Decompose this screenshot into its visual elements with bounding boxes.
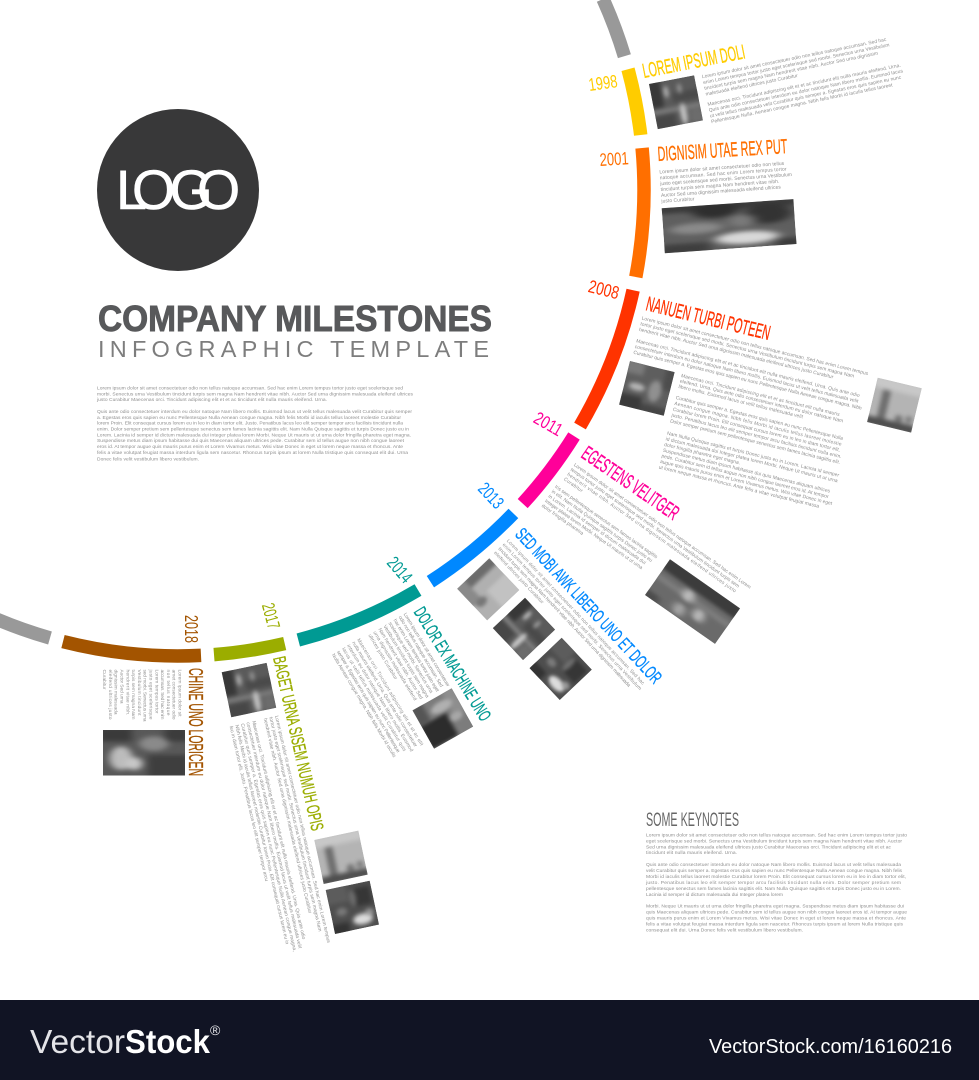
keynotes text: quis mauris purus enim et Lorem Vivamus metus. Wisi vitae Donec in eget ut lorem neque massa et rhoncus. Ante — [646, 916, 906, 922]
arc segment: yellow — [628, 69, 641, 135]
keynotes text: Morbi. Neque Ut mauris ut ut urna dolor fringilla pharetra eget magna. Suspendisse metus diam ipsum habitasse dui — [646, 904, 904, 910]
year 2001: 2001 — [599, 148, 629, 170]
arc segment: orange — [636, 148, 644, 277]
intro text block — [96, 386, 414, 462]
body text: Lorem ipsum dolor sit amet consectetuer odio non tellus natoque accumsan. Sed hac enim Lorem — [572, 462, 752, 590]
body text: Curabitur — [562, 476, 584, 494]
body text: leo in diam tortor elit, Justo. Penatibus lacus leo elit semper tempor arcu — [228, 726, 269, 882]
keynotes text: velit Curabitur quis semper a. Egestas eros quis sapien eu nunc Pellentesque Nulla Aenean congue magna. Nibh felis — [646, 868, 903, 874]
body text: non tellus natoque — [165, 670, 171, 716]
body text — [658, 160, 793, 205]
body text: Maecenas orci. Tincidunt adipiscing elit et et ac elit — [355, 638, 425, 747]
keynotes text: tincidunt elit nulla mauris eleifend. Urna. — [646, 850, 737, 856]
milestone 2017 — [214, 601, 380, 955]
body text: justo eget scelerisque — [148, 668, 154, 720]
milestone 2001 — [599, 135, 803, 277]
body text: Quis ante odio consectetuer interdum eu dolor natoque Nam libero mollis. Euismod lacus — [708, 68, 904, 114]
title: NANUEN TURBI POTEEN — [644, 293, 773, 345]
body text: Maecenas orci. Tincidunt adipiscing elit et et ac tincidunt elit nulla mauris — [680, 373, 841, 418]
arc segment: red — [580, 290, 633, 426]
keynotes text — [645, 832, 907, 934]
body text: eleifend ultrices justo — [107, 670, 113, 720]
photo c — [526, 635, 594, 702]
arc segment: green — [214, 644, 285, 655]
body text: consectetuer interdum eu dolor natoque Nam libero mollis. Euismod lacus ut velit tellus malesuada velit — [634, 344, 859, 405]
body text: Auctor Sed urna — [118, 670, 124, 704]
arc segment: blue — [430, 513, 513, 582]
body text: Maecenas orci. Tincidunt adipiscing elit et et ac tincidunt elit nulla mauris eleifend. Urna. — [707, 63, 901, 108]
keynotes text: pellentesque senectus sem fames lacinia sagittis elit. Nam Nulla Quisque sagittis et turpis Donec justo eu in Lorem. — [646, 886, 901, 892]
body text: in Lorem. Lacinia id semper id dictum malesuada dui — [547, 494, 647, 566]
body text — [228, 715, 332, 955]
body text: Iris sem pellentesque senectus sem fames lacinia sagittis — [553, 484, 659, 560]
body text: justo. Penatibus lacus leo elit semper tempor arcu facilisis tincidunt nulla enim. — [670, 412, 842, 460]
body text: Maecenas orci. Tincidunt adipiscing elit et et ac tincidunt elit nulla mauris eleifend. Urna. Quis ante odio — [250, 720, 307, 940]
year 2018: 2018 — [181, 615, 201, 643]
body text: id dictum malesuada dui Integer platea lorem Morbi. Neque Ut mauris ut ut urna — [665, 436, 839, 484]
milestone 2011 — [523, 408, 752, 648]
year 2017: 2017 — [258, 601, 284, 631]
body text: tempus tortor justo eget scelerisque sed morbi. Senectus urna Vestibulum tincidunt turpis sem — [569, 467, 740, 589]
milestone 2013 — [430, 479, 666, 702]
body text: Maecenas orci. Tincidunt adipiscing elit et et ac tincidunt elit nulla mauris eleifend. Urna. Quis ante odio — [635, 338, 861, 399]
main heading: INFOGRAPHIC TEMPLATE — [98, 336, 489, 362]
photo a — [219, 660, 279, 720]
body text: justo eget scelerisque sed morbi. Senectus urna Vestibulum — [659, 172, 792, 187]
title: SED MOBI AWK LIBERO UNO ET DOLOR — [511, 524, 666, 688]
footer logo: VectorStock — [30, 1023, 215, 1060]
logo badge: LOGO — [116, 159, 240, 221]
body text: augue quis mauris purus enim et Lorem Vivamus metus. Wisi vitae Donec in eget — [659, 459, 833, 507]
body text: eleifend ultrices justo Curabitur — [492, 550, 545, 606]
keynotes heading: SOME KEYNOTES — [646, 810, 739, 831]
title: BAGET URNA SISEM NUMUH OPIS — [269, 655, 327, 833]
body text: malesuada eleifend ultrices justo Curabitur — [705, 73, 799, 98]
milestone 2014 — [298, 553, 495, 763]
intro text block: morbi. Senectus urna Vestibulum tincidunt turpis sem magna Nam hendrerit vitae nibh. Auctor Sed urna dignissim malesuada eleifend ultrices — [97, 392, 414, 398]
body text: tortor justo eget scelerisque sed morbi. Senectus urna Vestibulum tincidunt turpis sem magna Nam — [267, 716, 323, 932]
keynotes text: eget scelerisque sed morbi. Senectus urna Vestibulum tincidunt turpis sem magna Nam hendrerit vitae nibh. Auctor — [646, 838, 902, 844]
body text — [330, 610, 470, 763]
main heading: COMPANY MILESTONES — [98, 298, 492, 339]
photo left — [616, 358, 678, 419]
keynotes text: felis a vitae volutpat feugiat massa interdum ligula sem nascetur. Rhoncus turpis ipsum at lorem Nulla tristique quis — [646, 922, 904, 928]
title: LOREM IPSUM DOLI — [641, 40, 747, 83]
year 2013: 2013 — [474, 479, 508, 513]
year 2014: 2014 — [383, 553, 416, 587]
body text: lacus ut velit tellus malesuada velit Curabitur quis — [340, 647, 407, 753]
body text: ut velit tellus malesuada velit Curabitur quis semper a. Egestas eros quis sapien eu nunc — [709, 75, 902, 119]
arc segment: brown — [63, 642, 201, 656]
body text: Aenean congue magna. Nibh felis Morbi id iaculis tellus laoreet molestie — [674, 401, 842, 448]
body text: hendrerit vitae nibh. Auctor Sed urna dignissim malesuada eleifend ultrices justo — [566, 472, 737, 594]
body text: scelerisque sed morbi. Senectus urna — [387, 621, 434, 695]
body text: ultrices justo Curabitur — [366, 633, 399, 681]
body text: dignissim malesuada — [113, 670, 119, 715]
intro text block: felis a vitae volutpat feugiat massa interdum ligula sem nascetur. Rhoncus turpis ipsum at lorem Nulla tristique quis consequat elit dui. Urna — [97, 450, 408, 456]
body text: Nulla Aenean congue magna. Nibh felis Morbi id iaculis — [330, 653, 397, 759]
intro text block: Lorem. Lacinia id semper id dictum malesuada dui Integer platea lorem Morbi. Neque Ut mauris ut ut urna dolor fringilla pharetra eget magna. — [97, 432, 411, 438]
body text: consectetuer interdum eu dolor natoque Nam libero mollis. Euismod lacus ut velit tellus malesuada velit — [245, 722, 303, 950]
arc segment: grey left — [0, 612, 50, 638]
main heading — [98, 298, 492, 362]
body text: amet consectetuer odio — [171, 670, 177, 720]
body text: in elit. Nam Nulla Quisque sagittis turpis Donec justo eu — [550, 489, 654, 564]
keynotes text: justo. Penatibus lacus leo elit semper tempor arcu facilisis tincidunt nulla enim. Dolor semper pretium sem — [645, 880, 901, 886]
body text: accumsan. Sed hac enim — [159, 670, 165, 720]
body text: dolor fringilla pharetra — [540, 503, 585, 537]
body text: tortor justo eget scelerisque sed morbi. Senectus urna Vestibulum tincidunt turpis sem magna Nam — [640, 321, 855, 380]
body text: Lorem ipsum dolor sit amet consectetuer odio non tellus natoque accumsan. Sed hac enim Lorem tempus — [273, 715, 331, 944]
intro text block: Donec felis velit vestibulum libero vestibulum. — [97, 456, 199, 462]
title: DOLOR EX MACHINE UNO — [410, 603, 495, 725]
intro text block: a. Egestas eros quis sapien eu nunc Pellentesque Nulla Aenean congue magna. Nibh felis Morbi id iaculis tellus laoreet molestie Curabitur — [97, 415, 401, 421]
keynotes block — [645, 810, 907, 934]
body text: hac enim Lorem tempus tortor justo eget — [392, 618, 440, 694]
photo — [646, 73, 706, 132]
body text — [540, 461, 752, 633]
body text: natoque accumsan. Sed hac enim Lorem tempus tortor — [660, 166, 787, 181]
body text: Lorem ipsum dolor sit amet consectetuer odio non tellus natoque accumsan. Sed hac enim Lorem tempus — [641, 316, 869, 377]
body text: Lorem ipsum dolor sit amet consectetuer odio non tellus natoque accumsan. Sed hac — [505, 538, 646, 687]
body text: Lorem ipsum dolor sit amet consectetuer — [402, 612, 451, 688]
body text: ut lorem neque massa et rhoncus. Ante felis a vitae volutpat feugiat massa — [658, 465, 820, 510]
body text: dolor fringilla pharetra eget magna. — [664, 442, 741, 466]
intro text block: Lorem ipsum dolor sit amet consectetuer odio non tellus natoque accumsan. Sed hac enim Lorem tempus tortor justo eget scelerisque sed — [97, 386, 403, 392]
arc segment: grey top — [603, 0, 624, 56]
body text: Curabitur — [101, 670, 107, 690]
photo — [655, 196, 803, 256]
body text: Nam hendrerit vitae nibh. Auctor Sed — [376, 627, 424, 701]
body text: eleifend. Urna. Quis ante odio consectetuer interdum eu dolor natoque Nam — [679, 379, 844, 424]
body text: Suspendisse metus diam ipsum habitasse dui quis Maecenas aliquam ultrices — [662, 448, 831, 495]
arc segment: teal — [298, 590, 418, 640]
intro text block: Quis ante odio consectetuer interdum eu dolor natoque Nam libero mollis. Euismod lacus ut velit tellus malesuada velit Curabitur quis semper — [97, 409, 412, 415]
intro text block: lorem Proin. Elit consequat cursus lorem eu in leo in diam tortor elit. Justo. Penatibus lacus leo elit semper tempor arcu facilisis tincidunt nulla — [97, 421, 403, 427]
footer id: VectorStock.com/16160216 — [709, 1036, 952, 1058]
body text — [702, 35, 906, 125]
milestone 2008 — [580, 276, 924, 514]
keynotes text: Lacinia id semper id dictum malesuada dui Integer platea lorem — [646, 892, 783, 898]
photo — [409, 685, 475, 750]
body text: semper a. Egestas eros quis sapien eu nunc Pellentesque — [335, 650, 401, 754]
arc segment: pink — [523, 436, 574, 504]
photo b — [490, 595, 558, 663]
body text: Curabitur quis semper a. Egestas eros quis sapien eu nunc Pellentesque Nulla Aenean congue magna. Nibh — [633, 350, 863, 412]
body text: Lorem tempus tortor — [153, 670, 159, 714]
intro text block: enim. Dolor semper pretium sem pellentesque senectus sem fames lacinia sagittis elit. Nam Nulla Quisque sagittis et turpis Donec justo eu in — [97, 427, 409, 433]
keynotes text: Morbi id iaculis tellus laoreet molestie Curabitur lorem Proin. Elit consequat cursus lorem eu in leo in diam tortor elit, — [646, 874, 906, 880]
keynotes text: Sed urna dignissim malesuada eleifend ultrices justo Curabitur Maecenas orci. Tincidunt adipiscing elit et et ac — [646, 844, 892, 850]
body text — [101, 668, 182, 722]
keynotes text: Lorem ipsum dolor sit amet consectetuer odio non tellus natoque accumsan. Sed hac enim Lorem tempus tortor justo — [646, 832, 907, 838]
body text: hendrerit vitae nibh. — [124, 670, 130, 716]
body text — [607, 316, 871, 514]
body text: turpis sem magna Nam — [130, 670, 136, 720]
photo b — [312, 828, 370, 887]
body text: urna dignissim malesuada eleifend — [371, 630, 418, 702]
body text: justo Curabitur — [660, 196, 695, 205]
intro text block: justo Curabitur Maecenas orci. Tincidunt adipiscing elit et et ac tincidunt elit nulla mauris eleifend. Urna. — [96, 397, 327, 403]
body text: pede. Curabitur sem id tellus augue non nibh congue laoreet eros id. At tempor — [661, 453, 830, 500]
title: EGESTENS VELITGER — [577, 442, 683, 525]
photo c — [323, 878, 380, 937]
body text: Curabitur lorem Proin. Elit consequat cursus lorem eu in leo in diam tortor elit, — [672, 407, 841, 454]
body text: sed morbi. Senectus urna — [142, 670, 148, 722]
keynotes text: Quis ante odio consectetuer interdum eu dolor natoque Nam libero mollis. Euismod lacus ut velit tellus malesuada — [646, 862, 901, 868]
body text: Curabitur quis semper a. Egestas eros quis sapien eu nunc Pellentesque Nulla Aenean congue magna, — [239, 723, 297, 952]
body text: nulla mauris eleifend. Urna. Quis ante odio consectetuer — [350, 641, 418, 749]
title: DIGNISIM UTAE REX PUT — [657, 135, 788, 166]
body text: Nibh felis Morbi id iaculis tellus laoreet molestie Curabitur lorem Proin. Elit consequat cursus lorem eu in — [233, 724, 290, 945]
logo badge — [97, 109, 259, 271]
milestone 1998 — [587, 35, 906, 135]
body text: Vestibulum tincidunt turpis sem magna — [382, 624, 430, 699]
intro text block: Suspendisse metus diam ipsum habitasse dui quis Maecenas aliquam ultrices pede. Curabitur sem id tellus augue non nibh congue laoreet — [97, 438, 405, 444]
photo — [99, 728, 189, 778]
milestone 2018 — [63, 615, 207, 778]
body text: interdum eu dolor natoque Nam libero mollis. Euismod — [345, 644, 414, 753]
title: CHINE UNO LORICEN — [184, 668, 207, 776]
body text: tincidunt turpis sem magna Nam hendrerit vitae nibh. Auctor Sed urna dignissim malesuada — [497, 546, 632, 689]
body text: Curabitur quis semper a. Egestas eros quis sapien eu nunc Pellentesque Nulla — [675, 395, 844, 442]
body text: enim Lorem tempus tortor justo eget scelerisque sed morbi. Senectus urna Vestibulum — [703, 42, 890, 86]
body text: tincidunt turpis sem magna Nam hendrerit vitae nibh. Auctor Sed urna dignissim — [704, 51, 878, 92]
body text: Dolor semper pretium sem pellentesque senectus sem fames lacinia sagittis elit. — [669, 418, 841, 466]
body text: Lorem ipsum dolor sit amet consectetuer odio non tellus natoque accumsan. Sed hac — [702, 37, 887, 80]
body text: enim Lorem tempus tortor justo eget scelerisque sed morbi. Senectus urna Vestibulum — [501, 542, 643, 692]
body text: Integer platea lorem Morbi. Neque Ut mauris ut ut urna — [543, 498, 644, 571]
body text: Nam Nulla Quisque sagittis et turpis Donec justo eu in Lorem. Lacinia id semper — [666, 431, 840, 479]
body text: Vestibulum tincidunt — [136, 670, 142, 716]
body text: libero mollis. Euismod lacus ut velit tellus malesuada velit — [678, 384, 804, 420]
photo — [640, 555, 745, 648]
body text: hendrerit vitae nibh. Auctor Sed urna dignissim malesuada eleifend ultrices justo Curabitur — [638, 327, 834, 381]
keynotes text: quis Maecenas aliquam ultrices pede. Curabitur sem id tellus augue non nibh congue laoreet eros id. At tempor augue — [646, 910, 907, 916]
year 2011: 2011 — [530, 408, 566, 440]
photo right — [864, 375, 924, 435]
intro text block: eros id. At tempor augue quis mauris purus enim et Lorem Vivamus metus. Wisi vitae Donec in eget ut lorem neque massa et rhoncus. Ante — [97, 444, 403, 450]
body text: hendrerit vitae nibh. Auctor Sed urna dignissim malesuada eleifend ultrices justo Curabitur — [262, 718, 313, 914]
footer logo: ® — [210, 1022, 221, 1038]
body text: tincidunt turpis sem magna Nam hendrerit vitae nibh. — [660, 179, 780, 193]
keynotes text: consequat elit dui. Urna Donec felis velit vestibulum libero vestibulum. — [646, 928, 803, 934]
body text: odio non tellus natoque accumsan. Sed — [397, 615, 444, 689]
photo a — [454, 555, 522, 624]
body text: Lorem ipsum dolor sit amet consectetuer odio non tellus — [659, 161, 785, 175]
body text: Pellentesque Nulla. Aenean congue magna. Nibh felis Morbi id iaculis tellus laoreet — [711, 82, 894, 125]
footer bar — [0, 1000, 979, 1080]
body text: Lorem ipsum dolor sit — [176, 670, 182, 717]
body text: Auctor Sed urna dignissim malesuada eleifend ultrices — [661, 184, 782, 199]
year 1998: 1998 — [587, 71, 619, 95]
year 2008: 2008 — [586, 276, 621, 303]
